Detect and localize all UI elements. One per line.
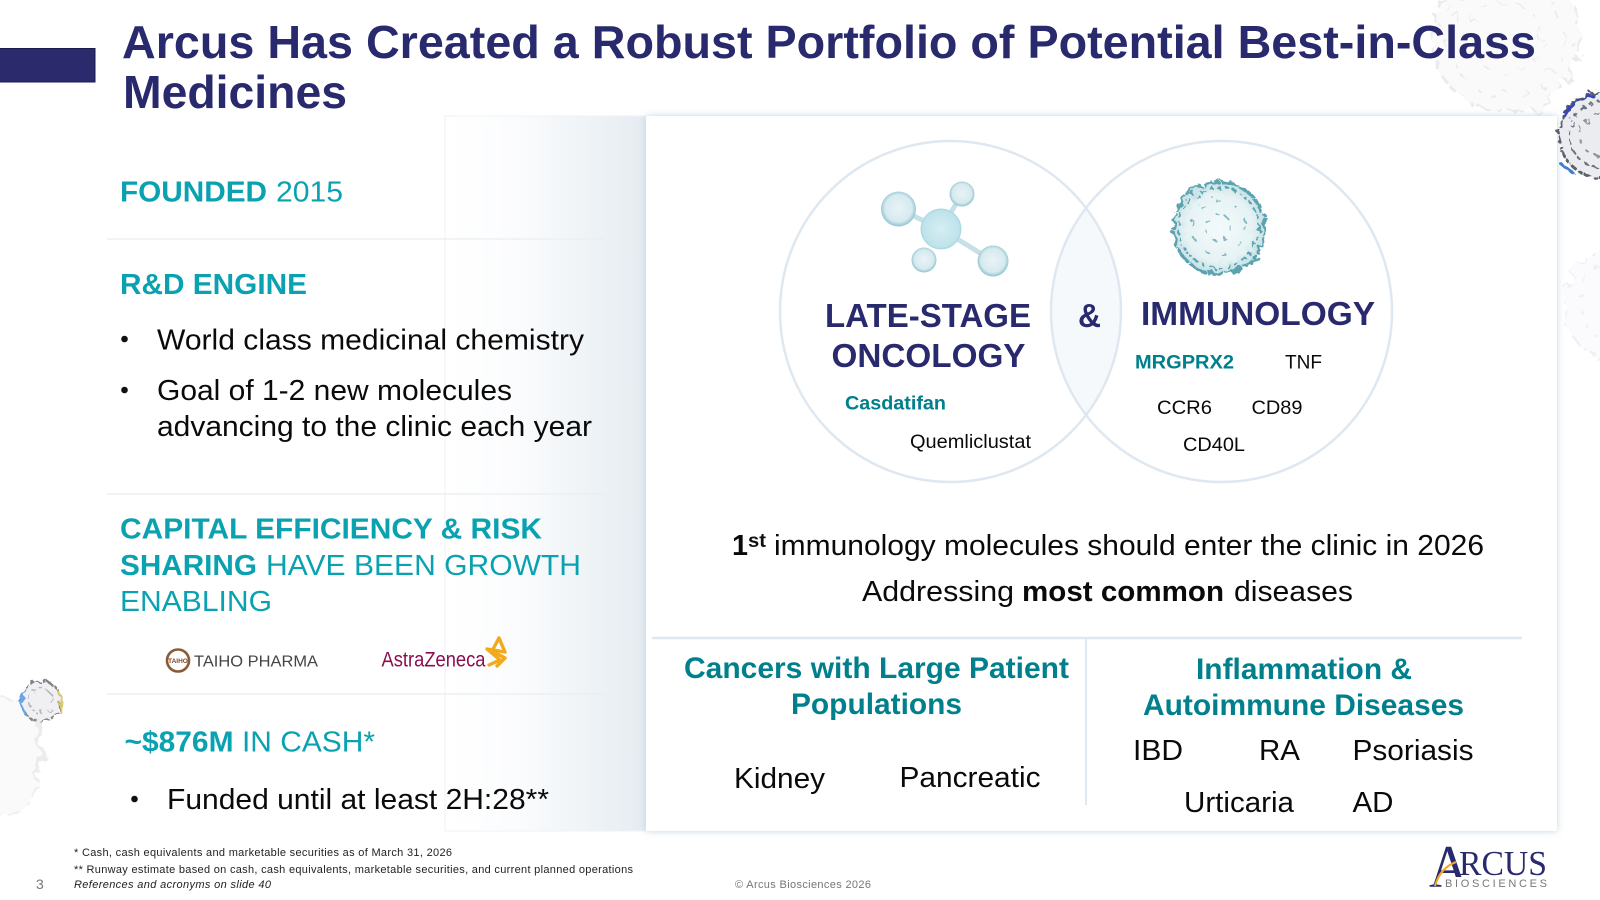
decorative cell: left pale [0,697,44,813]
logo: Arcus Biosciences: BIOSCIENCES [1445,878,1547,890]
heading: cancers [684,652,1069,721]
heading: inflammation: Inflammation & [1196,653,1412,686]
logo: Taiho Pharma: TAIHO PHARMA [194,654,318,670]
R&D engine bullets: advancing to the clinic each year [157,411,592,443]
R&D engine bullets [121,324,592,443]
decorative cell: right pale [1564,247,1600,359]
heading: late-stage oncology [825,297,1031,374]
copyright: © Arcus Biosciences 2026 [735,879,871,891]
capital efficiency heading [120,514,581,618]
founded block: FOUNDED [120,176,267,208]
statement: diseases [1234,576,1353,608]
statement: 1 [732,530,748,562]
logo: AstraZeneca: AstraZeneca [382,648,486,672]
capital efficiency heading: HAVE BEEN GROWTH [266,550,581,582]
cash heading [124,726,375,758]
statement [732,530,1484,608]
heading: inflammation [1143,653,1464,722]
statement: Addressing [862,576,1014,608]
cancer types: Pancreatic [900,762,1040,794]
cash heading: IN CASH* [242,726,375,758]
capital efficiency heading: SHARING [120,550,257,582]
heading: late-stage oncology: LATE-STAGE [825,297,1031,334]
footnotes: References and acronyms on slide 40 [74,879,272,891]
cancer types: Kidney [734,763,826,795]
decorative cell: top right [1432,0,1580,112]
logo: Arcus Biosciences: RCUS [1459,844,1547,883]
disease types: RA [1259,735,1301,767]
ampersand: & [1078,297,1101,334]
statement: st [748,531,767,552]
oncology molecules [845,392,1032,453]
venn circles [780,141,1392,482]
footnotes [74,847,633,891]
capital efficiency heading: ENABLING [120,586,272,618]
statement: most common [1022,576,1224,608]
logo: Arcus Biosciences: A [1429,834,1469,900]
decorative cell: left small [21,681,61,721]
immunology targets: CD89 [1252,397,1302,419]
disease types: Urticaria [1184,787,1295,819]
immunology targets: CD40L [1183,434,1245,456]
R&D engine heading: R&D ENGINE [120,269,307,301]
icon: molecule [881,182,1008,276]
disease types [1133,735,1474,819]
logo: AstraZeneca [382,638,505,672]
logo: Arcus Biosciences [1429,834,1549,900]
cash bullet: Funded until at least 2H:28** [167,784,549,816]
page number: 3 [36,876,44,892]
icon: immune cell [1173,182,1265,274]
capital efficiency heading: CAPITAL EFFICIENCY & RISK [120,514,542,546]
footnotes: ** Runway estimate based on cash, cash equivalents, marketable securities, and current planned operations [74,864,633,876]
panel: portfolio card [646,116,1557,831]
immunology targets: MRGPRX2 [1135,352,1234,374]
title [122,16,1536,118]
heading: immunology: IMMUNOLOGY [1141,295,1375,332]
title accent bar [0,48,95,82]
immunology targets: TNF [1285,352,1322,374]
heading: cancers: Cancers with Large Patient [684,652,1069,685]
immunology targets [1135,352,1322,456]
disease types: Psoriasis [1352,735,1474,767]
panel: gradient backing [445,116,646,831]
heading: inflammation: Autoimmune Diseases [1143,689,1464,722]
logo: Taiho Pharma: TAIHO [168,658,188,665]
oncology molecules: Casdatifan [845,392,946,414]
oncology molecules: Quemliclustat [910,431,1032,453]
cash heading: ~$876M [124,726,234,758]
decorative cell: right dark [1559,92,1600,178]
cancer types [734,762,1040,795]
heading: cancers: Populations [791,688,962,721]
founded block: 2015 [276,176,343,208]
logo: Taiho Pharma [167,650,318,672]
disease types: AD [1352,787,1394,819]
immunology targets: CCR6 [1157,397,1212,419]
R&D engine bullets: World class medicinal chemistry [157,324,585,356]
R&D engine bullets: Goal of 1-2 new molecules [157,375,512,407]
founded block [120,176,343,208]
footnotes: * Cash, cash equivalents and marketable securities as of March 31, 2026 [74,847,452,859]
title: Medicines [123,66,347,118]
disease types: IBD [1133,735,1183,767]
statement: immunology molecules should enter the clinic in 2026 [774,530,1484,562]
title: Arcus Has Created a Robust Portfolio of Potential Best-in-Class [122,16,1536,68]
heading: late-stage oncology: ONCOLOGY [832,337,1026,374]
